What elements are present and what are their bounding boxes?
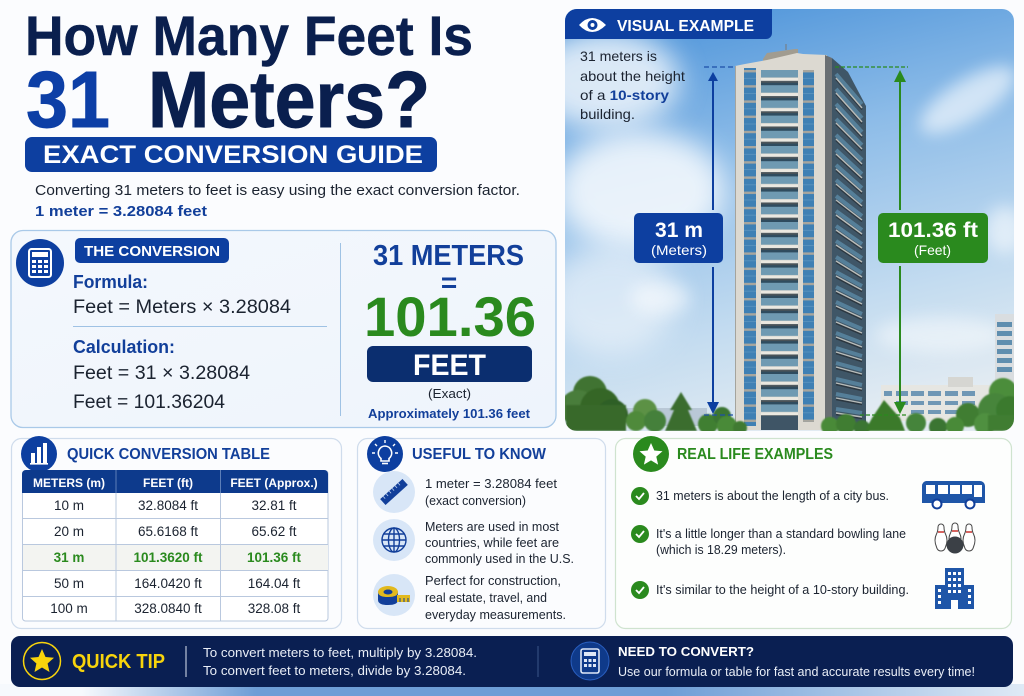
example: city bus: 31 meters is about the length of a city bus.	[656, 489, 889, 503]
item: where units are used: Meters are used in most	[425, 520, 560, 534]
quick tip text: To convert feet to meters, divide by 3.28084.	[203, 663, 466, 678]
heading: real life examples: REAL LIFE EXAMPLES	[677, 446, 833, 463]
label: 101.36 ft: (Feet)	[914, 242, 951, 258]
panel: visual example	[565, 9, 1014, 431]
item: where units are used: commonly used in the U.S.	[425, 552, 574, 566]
item: everyday uses	[373, 574, 566, 622]
icon: calculator	[16, 239, 64, 287]
intro text: Converting 31 meters to feet is easy using the exact conversion factor.	[35, 182, 520, 199]
formula block	[73, 272, 291, 318]
formula block: Formula:	[73, 272, 148, 292]
table rows: 65.62 ft	[251, 524, 297, 539]
table rows: 328.08 ft	[248, 601, 301, 616]
arrow: feet height	[835, 67, 908, 415]
icon: office building	[935, 568, 974, 609]
visual example caption: 31 meters is	[580, 48, 657, 64]
result block: 101.36	[364, 285, 536, 348]
subtitle pill	[25, 137, 437, 172]
heading pill: the conversion: THE CONVERSION	[84, 243, 220, 260]
distant buildings	[627, 314, 1014, 426]
table rows: 164.04 ft	[248, 576, 301, 591]
icon: ruler	[380, 479, 408, 505]
label: 101.36 ft: 101.36 ft	[888, 219, 978, 242]
heading: useful to know: USEFUL TO KNOW	[412, 446, 547, 463]
icon: calculator badge	[571, 642, 609, 680]
table header: METERS (m)	[33, 476, 105, 490]
icon: star badge	[633, 436, 669, 472]
table rows: 10 m	[54, 498, 84, 513]
example: city bus	[631, 487, 889, 505]
example: bowling lane: (which is 18.29 meters).	[656, 543, 786, 557]
icon: bowling pins and ball	[935, 523, 975, 554]
visual example caption	[580, 48, 685, 122]
icon: globe	[382, 528, 406, 552]
item: everyday uses: real estate, travel, and	[425, 591, 547, 605]
table rows: 50 m	[54, 576, 84, 591]
table rows: 101.3620 ft	[133, 550, 203, 565]
item: where units are used: countries, while feet are	[425, 536, 559, 550]
title line two: Meters?	[148, 55, 430, 144]
heading tab: visual example	[565, 9, 772, 39]
item: exact conversion: 1 meter = 3.28084 feet	[425, 477, 558, 491]
formula block: Feet = Meters × 3.28084	[73, 297, 291, 318]
subtitle pill: EXACT CONVERSION GUIDE	[43, 141, 423, 169]
conversion table	[22, 470, 328, 621]
title line two	[26, 55, 430, 144]
result block: FEET	[413, 349, 486, 382]
icon: tape measure	[378, 586, 410, 605]
side face balconies	[836, 74, 862, 418]
icon: quick tip star	[24, 642, 60, 680]
icon: bar chart	[21, 436, 57, 472]
table rows: 164.0420 ft	[134, 576, 202, 591]
quick tip text: To convert meters to feet, multiply by 3.28084.	[203, 645, 477, 660]
panel: real life examples	[616, 436, 1012, 628]
item: where units are used	[373, 519, 574, 566]
need to convert text: NEED TO CONVERT?	[618, 644, 754, 659]
heading: quick conversion table: QUICK CONVERSION TABLE	[67, 446, 270, 463]
trees	[560, 376, 1024, 436]
quick tip text	[203, 645, 477, 678]
footer bar	[11, 636, 1013, 687]
calculation block: Feet = 101.36204	[73, 392, 225, 413]
heading pill: the conversion	[75, 238, 229, 263]
table rows: 328.0840 ft	[134, 601, 202, 616]
table rows: 32.8084 ft	[138, 498, 198, 513]
tower	[735, 44, 866, 430]
example: bowling lane: It's a little longer than a standard bowling lane	[656, 527, 906, 541]
table rows: 65.6168 ft	[138, 524, 198, 539]
result block: Approximately 101.36 feet	[368, 406, 531, 421]
item: everyday uses: everyday measurements.	[425, 608, 566, 622]
label: 101.36 ft	[878, 213, 988, 263]
result block: (Exact)	[428, 386, 471, 401]
item: exact conversion	[373, 471, 558, 513]
title line one: How Many Feet Is	[25, 4, 473, 67]
example: 10-story building: It's similar to the height of a 10-story building.	[656, 583, 909, 597]
table rows: 100 m	[50, 601, 88, 616]
table header: FEET (Approx.)	[230, 476, 318, 490]
panel: the conversion	[11, 230, 556, 428]
visual example caption: of a 10-story	[580, 87, 669, 103]
table header	[33, 476, 318, 490]
panel: quick conversion table	[12, 436, 342, 628]
label: 31 m: 31 m	[655, 219, 703, 242]
table rows: 20 m	[54, 524, 84, 539]
quick tip label: QUICK TIP	[72, 651, 165, 673]
result block: =	[441, 267, 457, 298]
icon: light bulb	[367, 436, 403, 472]
visual example caption: building.	[580, 106, 635, 122]
intro text: 1 meter = 3.28084 feet	[35, 203, 207, 220]
heading tab: visual example: VISUAL EXAMPLE	[617, 18, 754, 35]
photo of building against sky	[565, 9, 1014, 431]
table rows	[50, 498, 302, 616]
visual example caption: about the height	[580, 68, 685, 84]
title	[25, 4, 473, 144]
table header: FEET (ft)	[143, 476, 193, 490]
panel: useful to know	[358, 436, 606, 628]
result block	[364, 240, 536, 421]
need to convert text	[618, 644, 975, 679]
table rows: 32.81 ft	[251, 498, 297, 513]
table rows: 31 m	[54, 550, 84, 565]
table rows: 101.36 ft	[247, 550, 302, 565]
example: bowling lane	[631, 525, 906, 557]
icon: bus	[922, 481, 985, 508]
title line two: 31	[26, 55, 110, 144]
result block: 31 METERS	[373, 240, 524, 272]
calculation block: Calculation:	[73, 337, 175, 357]
item: everyday uses: Perfect for construction,	[425, 574, 561, 588]
calculation block: Feet = 31 × 3.28084	[73, 363, 250, 384]
icon: eye	[579, 18, 606, 32]
bottom blue background band	[0, 684, 1024, 696]
label: 31 m	[634, 213, 723, 263]
intro text	[35, 182, 520, 220]
label: 31 m: (Meters)	[651, 242, 707, 258]
arrow: meters height	[704, 67, 735, 415]
calculation block	[73, 337, 250, 413]
need to convert text: Use our formula or table for fast and accurate results every time!	[618, 665, 975, 679]
item: exact conversion: (exact conversion)	[425, 494, 526, 508]
